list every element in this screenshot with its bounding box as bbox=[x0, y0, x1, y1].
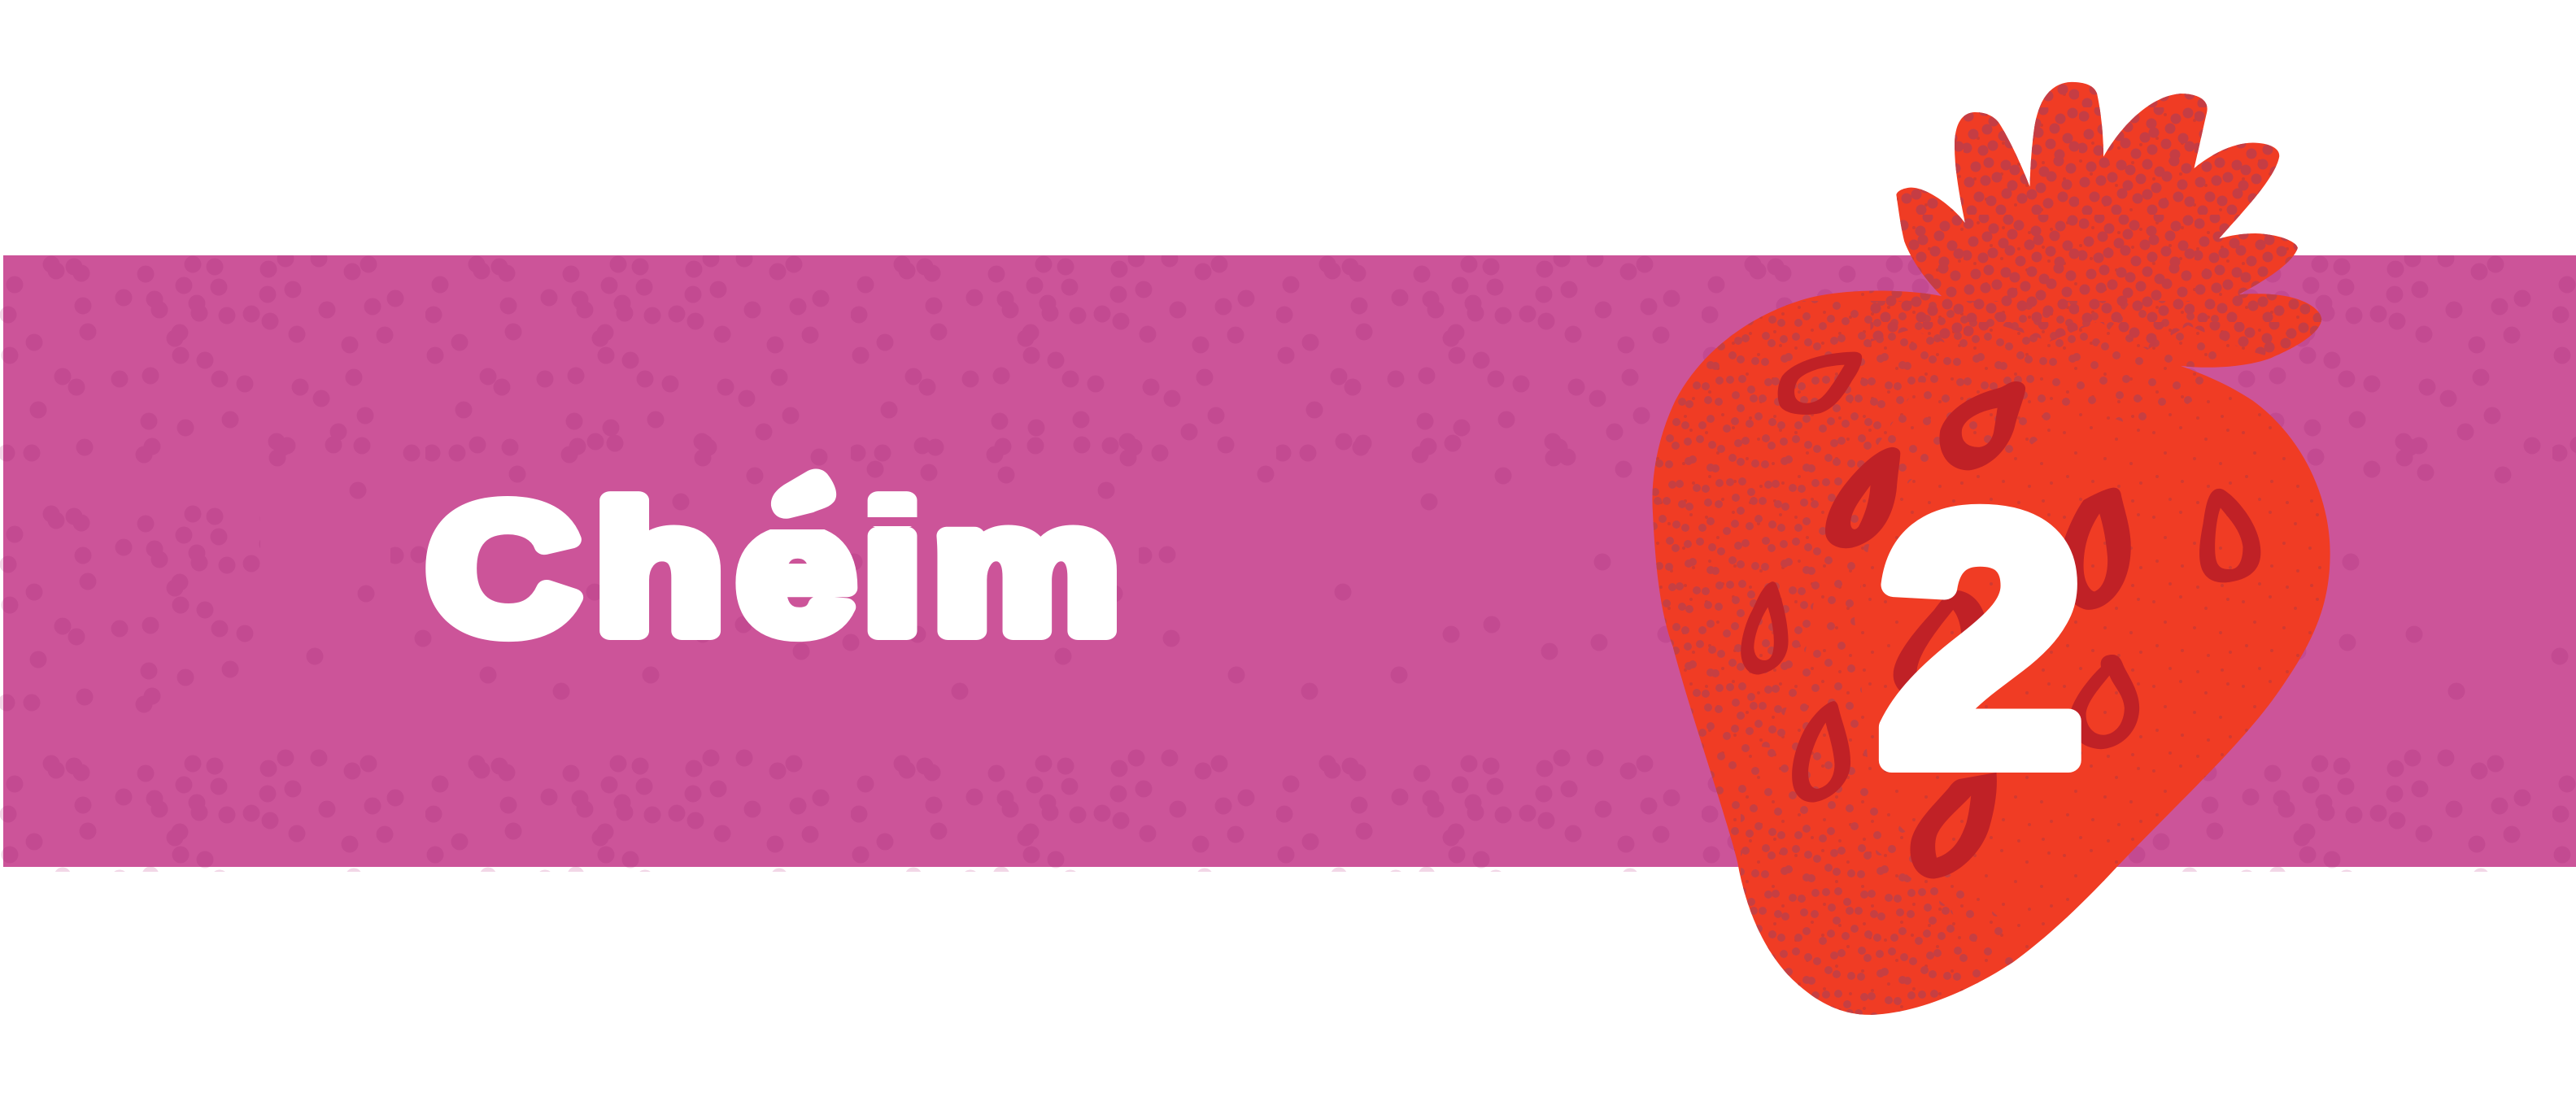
speckle texture on strawberry bbox=[1643, 65, 2359, 1025]
step number 2: 2 bbox=[1879, 445, 2083, 835]
seed 7 bbox=[1792, 701, 1850, 803]
seed 5 bbox=[2199, 489, 2260, 582]
strawberry seeds bbox=[1741, 352, 2260, 878]
seed 2 bbox=[1939, 381, 2025, 470]
seed 4 bbox=[2059, 488, 2131, 610]
strawberry body and leaves bbox=[1652, 82, 2330, 1015]
seed 1 bbox=[1778, 352, 1862, 415]
seed 8 bbox=[1894, 590, 1987, 703]
seed 6 bbox=[1741, 581, 1789, 675]
title: Chéim: Chéim bbox=[427, 468, 1119, 669]
panel: pink banner band bbox=[0, 255, 2576, 872]
seed 10 bbox=[1910, 773, 1997, 878]
seed 9 bbox=[2070, 655, 2139, 749]
seed 3 bbox=[1825, 447, 1900, 548]
icon: strawberry bbox=[1643, 65, 2359, 1025]
